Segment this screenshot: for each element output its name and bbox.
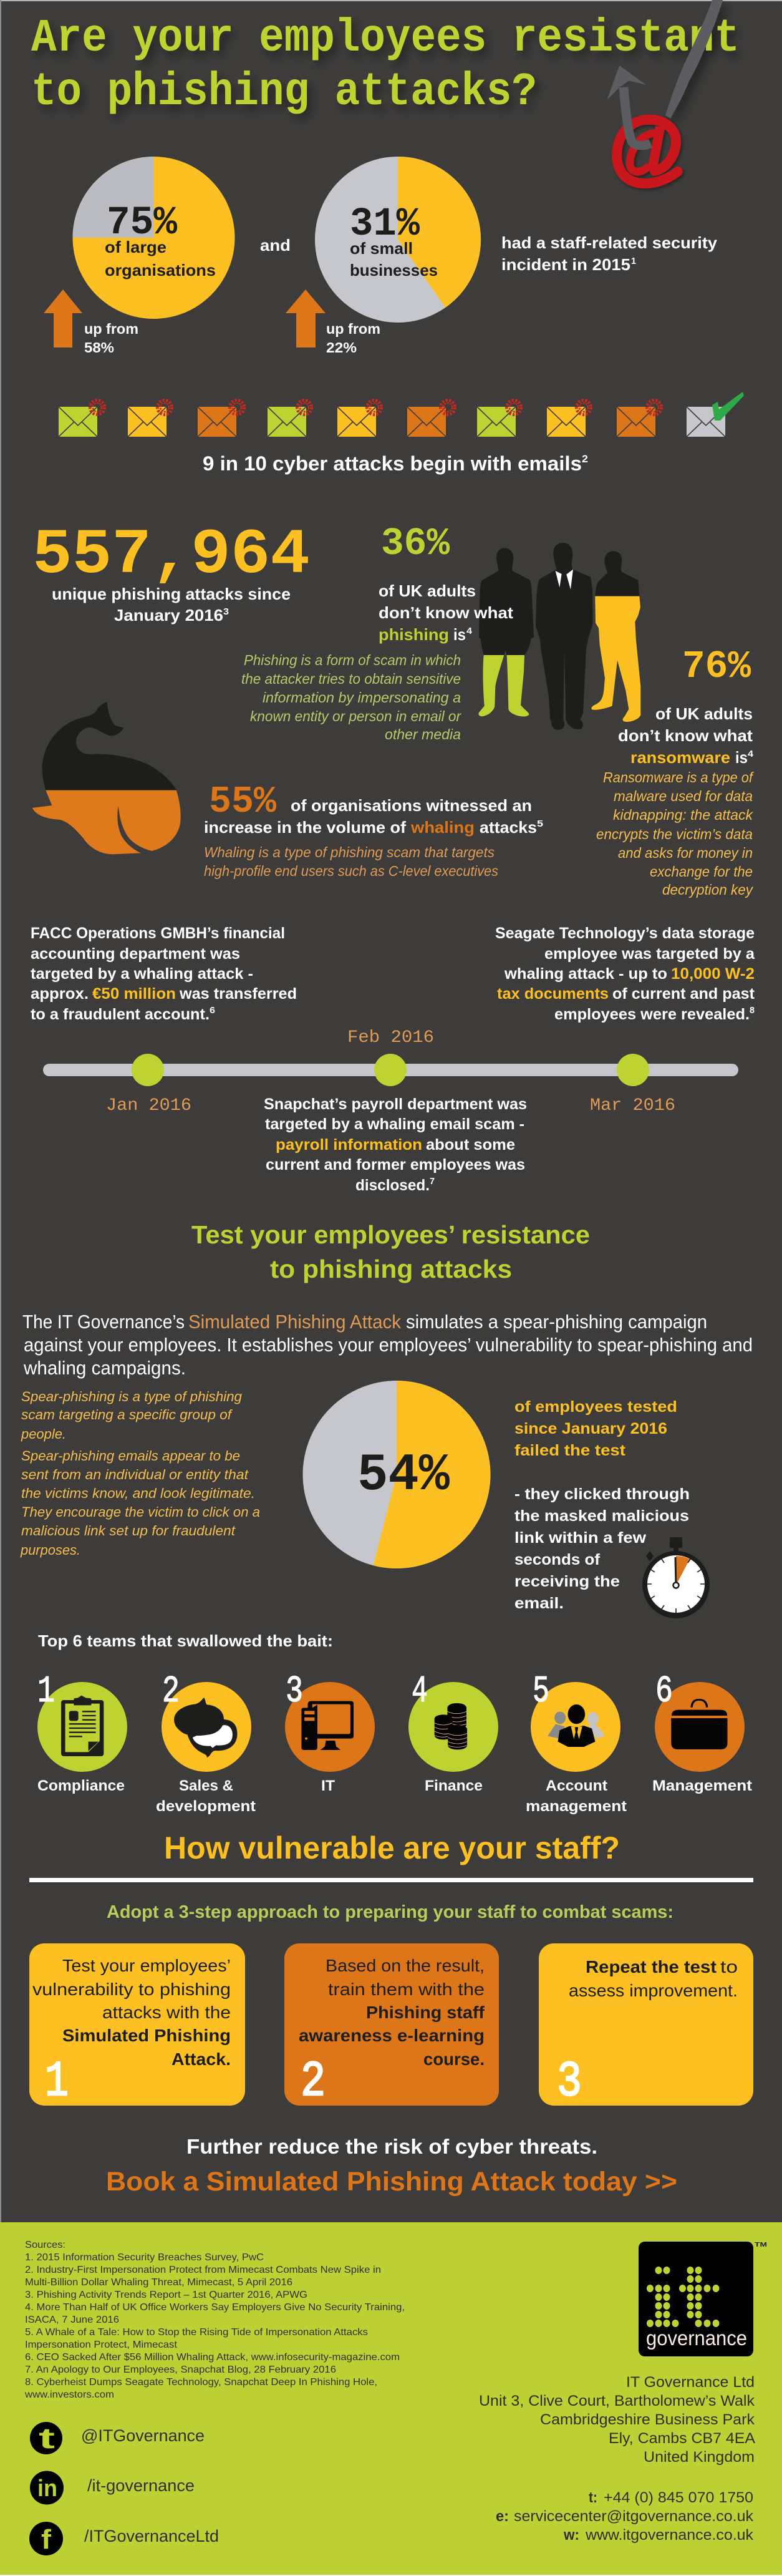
title — [31, 12, 740, 119]
text: Snapchat case study: payroll information — [276, 1136, 422, 1154]
text: ransomware definition: Ransomware is a type of — [603, 769, 754, 785]
title: to phishing attacks? — [31, 66, 537, 119]
social: linkedin — [30, 2471, 195, 2504]
icon: speech bubbles — [174, 1698, 237, 1757]
number 3: 3 — [286, 1671, 303, 1713]
card: step 3: assess improvement. — [569, 1981, 738, 2000]
heading: test your employees — [191, 1220, 590, 1283]
stat: 557,964 unique phishing attacks: 557,964 — [32, 519, 310, 591]
timeline label: Jan 2016: Jan 2016 — [106, 1096, 191, 1115]
icon: clipboard — [61, 1696, 104, 1756]
text: Snapchat case study: Snapchat’s payroll department was — [264, 1096, 527, 1113]
text: contact details: servicecenter@itgovernance.co.uk — [514, 2508, 754, 2525]
label: Finance: Finance — [425, 1777, 483, 1794]
icon: email 4 — [268, 401, 312, 437]
label: Sales and development: Sales & — [179, 1777, 233, 1794]
icon: email 2 — [128, 401, 172, 437]
call to action — [106, 2135, 677, 2197]
text: phishing definition: the attacker tries to obtain sensitive — [241, 671, 461, 687]
text: Seagate case study: tax documents — [497, 985, 609, 1003]
timeline bar — [43, 1064, 738, 1076]
text: clicked through link: link within a few — [514, 1529, 647, 1547]
timeline marker: February — [374, 1054, 407, 1086]
stat: 36 percent do not know phishing — [379, 522, 513, 644]
text: address: Cambridgeshire Business Park — [540, 2411, 755, 2428]
team 4: finance — [408, 1671, 498, 1794]
text: whaling definition — [204, 844, 498, 879]
logo: IT Governance — [639, 2242, 767, 2356]
text: and: and — [260, 236, 291, 255]
text: simulated phishing attack intro — [22, 1311, 753, 1379]
icon: coin stacks — [435, 1703, 467, 1749]
stat: 55 percent whaling increase: whaling — [410, 818, 475, 837]
icon: email 3 — [198, 401, 244, 437]
text: clicked through link: - they clicked through — [514, 1485, 690, 1503]
text: phishing definition: information by impersonating a — [263, 689, 461, 706]
text: clicked through link: receiving the — [514, 1573, 620, 1590]
text: spear-phishing definition: They encourage the victim to click on a — [21, 1504, 260, 1520]
text: clicked through link: the masked malicious — [514, 1507, 689, 1525]
text: address — [479, 2374, 755, 2466]
label: Compliance: Compliance — [37, 1777, 125, 1794]
stat: 55 percent whaling increase: of organisations witnessed an — [291, 796, 532, 815]
text: spear-phishing definition: Spear-phishing is a type of phishing — [21, 1389, 243, 1404]
icon: stopwatch — [642, 1537, 710, 1618]
label: Account management: Account — [546, 1777, 607, 1794]
stat: 36 percent do not know phishing: 4 — [466, 626, 473, 636]
stat: 36 percent do not know phishing: 36% — [381, 522, 450, 566]
text: simulated phishing attack intro: whaling campaigns. — [23, 1357, 186, 1379]
text: whaling definition: high-profile end users such as C-level executives — [204, 863, 498, 879]
label: IT: IT — [321, 1777, 335, 1794]
text: Seagate case study — [495, 925, 755, 1023]
number 1: 1 — [37, 1671, 55, 1713]
text: security incident statement: incident in 2015 — [501, 255, 630, 274]
text: security incident statement — [501, 233, 718, 274]
stat: 76 percent do not know ransomware — [618, 644, 754, 767]
text: FACC case study: approx. — [31, 985, 89, 1003]
text: sources: 8. Cyberheist Dumps Seagate Technology, Snapchat Deep In Phishing Hole, — [25, 2377, 377, 2388]
text: simulated phishing attack intro: simulates a spear-phishing campaign — [406, 1311, 707, 1333]
pie chart: 31 percent of small businesses: businesses — [350, 261, 438, 279]
logo: IT Governance: governance — [646, 2326, 747, 2350]
heading: how vulnerable are your staff: How vulnerable are your staff? — [164, 1830, 620, 1865]
text: spear-phishing definition: purposes. — [20, 1542, 80, 1558]
icon: briefcase — [671, 1699, 727, 1749]
stat: 557,964 unique phishing attacks — [32, 519, 310, 625]
card: step 2: Based on the result, — [326, 1956, 485, 1975]
text: simulated phishing attack intro: against your employees. It establishes your employees’ vulnerability to spear-phishing and — [24, 1334, 753, 1356]
footer panel — [0, 2222, 782, 2576]
icon: red at sign on hook — [617, 120, 678, 183]
number 6: 6 — [655, 1671, 673, 1713]
text: phishing definition: Phishing is a form of scam in which — [244, 652, 461, 668]
social: facebook: /ITGovernanceLtd — [84, 2527, 219, 2545]
text: spear-phishing definition: scam targeting a specific group of — [21, 1407, 233, 1422]
text: FACC case study: FACC Operations GMBH’s financial — [31, 925, 285, 942]
text: FACC case study: to a fraudulent account. — [31, 1006, 210, 1023]
text: spear-phishing definition: malicious link set up for fraudulent — [21, 1523, 236, 1538]
stat: 36 percent do not know phishing: is — [453, 625, 466, 644]
text: Snapchat case study: disclosed. — [355, 1177, 430, 1194]
text: sources: Sources: — [25, 2240, 65, 2250]
social: facebook: f — [41, 2524, 51, 2555]
text: address: Unit 3, Clive Court, Bartholomew’s Walk — [479, 2393, 755, 2409]
stat: 36 percent do not know phishing: don’t know what — [379, 603, 513, 622]
icon: email 8 — [547, 401, 591, 437]
icon: fishing hook line shadow — [665, 0, 723, 119]
pie chart: 31 percent of small businesses: 31% — [350, 202, 420, 247]
text: sources: 5. A Whale of a Tale: How to Stop the Rising Tide of Impersonation Attacks — [25, 2327, 368, 2338]
text: contact details: t: — [589, 2489, 597, 2506]
text: contact details: www.itgovernance.co.uk — [585, 2527, 754, 2544]
social: twitter: @ITGovernance — [81, 2426, 205, 2445]
text: Seagate case study: employee was targeted by a — [544, 945, 755, 963]
text: address: IT Governance Ltd — [626, 2374, 755, 2391]
icon: three silhouettes of adults — [478, 543, 640, 730]
icon: email 5 — [337, 401, 382, 437]
timeline marker: January — [132, 1054, 164, 1086]
silhouette: left man with green legs — [478, 548, 534, 716]
number 3: 3 — [557, 2054, 582, 2111]
card: step 1: Simulated Phishing — [62, 2026, 231, 2045]
text: Seagate case study: Seagate Technology’s data storage — [495, 925, 755, 942]
card: step 2: course. — [423, 2049, 485, 2069]
icon: hook line over title — [683, 0, 723, 81]
text: spear-phishing definition: Spear-phishing emails appear to be — [21, 1448, 240, 1464]
card: step 1: Attack. — [171, 2049, 231, 2069]
icon: email 7 — [477, 401, 521, 437]
text: Seagate case study: 8 — [750, 1005, 755, 1016]
text: sources: 1. 2015 Information Security Breaches Survey, PwC — [25, 2252, 264, 2263]
number 2: 2 — [162, 1671, 180, 1713]
number 4: 4 — [412, 1671, 428, 1713]
text: Snapchat case study: about some — [426, 1136, 515, 1154]
social: twitter — [30, 2422, 205, 2454]
text: address: Ely, Cambs CB7 4EA — [609, 2430, 755, 2447]
arrow up from 22 percent: up from — [326, 321, 380, 337]
text: sources: 4. More Than Half of UK Office Workers Say Employers Give No Security Training, — [25, 2302, 405, 2313]
number 1: 1 — [45, 2054, 69, 2111]
pie chart: 31 percent of small businesses: of small — [350, 239, 413, 258]
pie chart: 54 percent failed — [303, 1381, 490, 1568]
stat: 36 percent do not know phishing: of UK adults — [379, 581, 476, 600]
label: Account management: management — [526, 1798, 627, 1815]
card: step 1: Test your employees’ — [62, 1956, 231, 1975]
stat: 76 percent do not know ransomware: 76% — [682, 644, 751, 689]
text: security incident statement: had a staff-related security — [501, 233, 718, 252]
panel: staff related incidents — [44, 157, 718, 356]
stat: 557,964 unique phishing attacks: 3 — [223, 606, 229, 617]
card: step 1: vulnerability to phishing — [32, 1980, 231, 1999]
card: step 3: to — [720, 1957, 738, 1976]
label: Sales and development: development — [156, 1798, 256, 1815]
text: spear-phishing definition — [20, 1389, 260, 1558]
text: simulated phishing attack intro: The IT Governance’s — [22, 1311, 185, 1333]
arrow up from 58 percent: up from — [84, 321, 138, 337]
text: phishing definition: known entity or person in email or — [250, 708, 461, 724]
text: security incident statement: 1 — [631, 256, 636, 266]
text: sources: 6. CEO Sacked After $56 Million Whaling Attack, www.infosecurity-magazine.com — [25, 2352, 400, 2363]
timeline label: Mar 2016: Mar 2016 — [590, 1096, 675, 1115]
heading: test your employees: to phishing attacks — [270, 1255, 512, 1283]
stat: 557,964 unique phishing attacks: January 2016 — [114, 606, 223, 625]
stat: 55 percent whaling increase: attacks — [480, 818, 537, 837]
text: ransomware definition: malware used for data — [614, 788, 753, 804]
text: employees tested failed: since January 2016 — [514, 1420, 667, 1437]
social: linkedin: in — [37, 2476, 57, 2502]
text: spear-phishing definition: people. — [21, 1426, 66, 1442]
arrow up from 58 percent: 58% — [84, 339, 114, 356]
text: ransomware definition: kidnapping: the attack — [613, 807, 753, 823]
icon row: ten emails — [59, 392, 744, 437]
text: sources: 3. Phishing Activity Trends Report – 1st Quarter 2016, APWG — [25, 2290, 307, 2300]
stat: 557,964 unique phishing attacks: unique phishing attacks since — [52, 585, 291, 603]
text: ransomware definition — [596, 769, 754, 898]
text: employees tested failed: of employees tested — [514, 1398, 677, 1416]
silhouette: right man with yellow legs — [591, 551, 640, 722]
timeline — [43, 1028, 738, 1115]
text: employees tested failed — [514, 1398, 677, 1459]
stat: 55 percent whaling increase: 55% — [209, 781, 277, 824]
icon: safe email with check mark — [687, 392, 744, 437]
text: sources — [24, 2240, 405, 2400]
text: contact details: +44 (0) 845 070 1750 — [604, 2489, 753, 2506]
stat: 76 percent do not know ransomware: is — [735, 748, 748, 767]
text: ransomware definition: exchange for the — [650, 863, 753, 880]
stat: 55 percent whaling increase — [204, 781, 543, 837]
card: step 3: Repeat the test — [586, 1957, 717, 1976]
social: twitter: t — [39, 2422, 55, 2454]
text: 9 in 10 cyber attacks: 2 — [582, 453, 588, 465]
text: Seagate case study: 10,000 W-2 — [671, 965, 755, 983]
number 5: 5 — [533, 1671, 549, 1713]
stat: 55 percent whaling increase: increase in the volume of — [204, 818, 406, 837]
team 6: management — [652, 1671, 752, 1794]
text: Snapchat case study: targeted by a whaling email scam - — [265, 1115, 524, 1133]
icon: hook barb — [607, 66, 650, 145]
text: clicked through link — [514, 1485, 690, 1612]
timeline marker: March — [617, 1054, 649, 1086]
pie chart: 75 percent of large organisations: of large — [105, 238, 167, 256]
text: sources: ISACA, 7 June 2016 — [25, 2315, 119, 2325]
text: Seagate case study: employees were revealed. — [554, 1006, 750, 1023]
call to action: Book a Simulated Phishing Attack today >> — [106, 2167, 677, 2197]
label: Sales and development — [156, 1777, 256, 1815]
card: step 2: train them with the — [328, 1980, 485, 1999]
text: clicked through link: seconds of — [514, 1551, 601, 1568]
pie chart: 75 percent of large organisations: 75% — [107, 201, 178, 246]
card: step 1: attacks with the — [102, 2003, 231, 2022]
heading: top 6 teams: Top 6 teams that swallowed the bait: — [38, 1631, 333, 1650]
card: step 3 — [539, 1943, 753, 2111]
text: address: United Kingdom — [644, 2449, 755, 2466]
text: spear-phishing definition: sent from an individual or entity that — [21, 1467, 249, 1482]
label: Management: Management — [652, 1777, 752, 1794]
text: contact details — [496, 2489, 754, 2544]
pie chart: 31 percent of small businesses — [315, 157, 481, 323]
text: ransomware definition: decryption key — [662, 882, 753, 898]
text: spear-phishing definition: the victims know, and look legitimate. — [21, 1485, 255, 1501]
text: contact details: e: — [496, 2508, 509, 2525]
text: clicked through link: email. — [514, 1595, 564, 1612]
arrow up from 22 percent — [286, 289, 380, 356]
card: step 1 — [29, 1943, 245, 2111]
call to action: Further reduce the risk of cyber threats. — [186, 2135, 597, 2158]
text: sources: 2. Industry-First Impersonation Protect from Mimecast Combats New Spike in — [25, 2265, 381, 2275]
icon: email 6 — [407, 401, 455, 437]
text: FACC case study: targeted by a whaling attack - — [31, 965, 253, 983]
text: phishing definition — [241, 652, 461, 742]
text: employees tested failed: failed the test — [514, 1442, 626, 1459]
team 1: compliance — [37, 1671, 127, 1794]
text: Seagate case study: whaling attack - up to — [504, 965, 667, 983]
team 2: sales and development — [156, 1671, 256, 1815]
team 3: IT — [285, 1671, 375, 1794]
stat: 76 percent do not know ransomware: of UK adults — [655, 704, 753, 723]
icon: email 9 — [617, 401, 661, 437]
heading: test your employees: Test your employees’ resistance — [191, 1220, 590, 1249]
text: sources: www.investors.com — [24, 2389, 114, 2400]
icon: manager with team — [548, 1704, 605, 1747]
pie chart: 54 percent failed: 54% — [357, 1446, 450, 1505]
silhouette: centre man in suit — [536, 543, 593, 730]
timeline label: Feb 2016: Feb 2016 — [347, 1028, 434, 1047]
pie chart: 75 percent of large organisations: organisations — [105, 261, 216, 279]
social: facebook — [29, 2522, 219, 2555]
text: FACC case study — [31, 925, 297, 1023]
social: linkedin: /it-governance — [87, 2476, 195, 2495]
card: step 2 — [284, 1943, 499, 2111]
icon: whale — [32, 702, 181, 854]
pie chart: 75 percent of large organisations — [72, 157, 234, 319]
text: FACC case study: was transferred — [179, 985, 297, 1003]
text: FACC case study: €50 million — [92, 985, 176, 1003]
arrow up from 22 percent: 22% — [326, 339, 357, 356]
stat: 36 percent do not know phishing: phishing — [379, 625, 449, 644]
stat: 76 percent do not know ransomware: ransomware — [630, 748, 730, 767]
text: sources: 7. An Apology to Our Employees, Snapchat Blog, 28 February 2016 — [25, 2365, 336, 2375]
stat: 55 percent whaling increase: 5 — [537, 819, 543, 829]
heading: adopt a 3-step approach: Adopt a 3-step approach to preparing your staff to combat scams: — [107, 1902, 673, 1922]
text: contact details: w: — [563, 2527, 579, 2544]
arrow up from 58 percent — [44, 289, 138, 356]
text: sources: Multi-Billion Dollar Whaling Threat, Mimecast, 5 April 2016 — [25, 2277, 292, 2288]
number 2: 2 — [301, 2054, 326, 2111]
text: sources: Impersonation Protect, Mimecast — [25, 2340, 178, 2350]
text: ransomware definition: and asks for money in — [618, 845, 753, 861]
card: step 2: Phishing staff — [366, 2003, 485, 2022]
card: step 2: awareness e-learning — [299, 2026, 485, 2045]
text: Seagate case study: of current and past — [612, 985, 755, 1003]
label: Account management — [526, 1777, 627, 1815]
text: FACC case study: accounting department was — [31, 945, 240, 963]
text: Snapchat case study — [264, 1096, 527, 1194]
icon: email 1 — [59, 401, 105, 437]
text: FACC case study: 6 — [210, 1005, 215, 1016]
logo: IT Governance: TM — [755, 2242, 767, 2248]
text: whaling definition: Whaling is a type of phishing scam that targets — [204, 844, 495, 860]
stat: 76 percent do not know ransomware: 4 — [748, 749, 754, 759]
text: 9 in 10 cyber attacks: 9 in 10 cyber attacks begin with emails — [203, 452, 582, 475]
text: Snapchat case study: current and former employees was — [266, 1156, 525, 1174]
text: phishing definition: other media — [385, 726, 461, 742]
text: Snapchat case study: 7 — [430, 1176, 435, 1187]
text: simulated phishing attack intro: Simulated Phishing Attack — [188, 1311, 401, 1333]
stat: 76 percent do not know ransomware: don’t know what — [618, 726, 753, 745]
icon: desktop computer — [301, 1701, 354, 1750]
team 5: account management — [526, 1671, 627, 1815]
text: ransomware definition: encrypts the victim’s data — [596, 826, 753, 842]
